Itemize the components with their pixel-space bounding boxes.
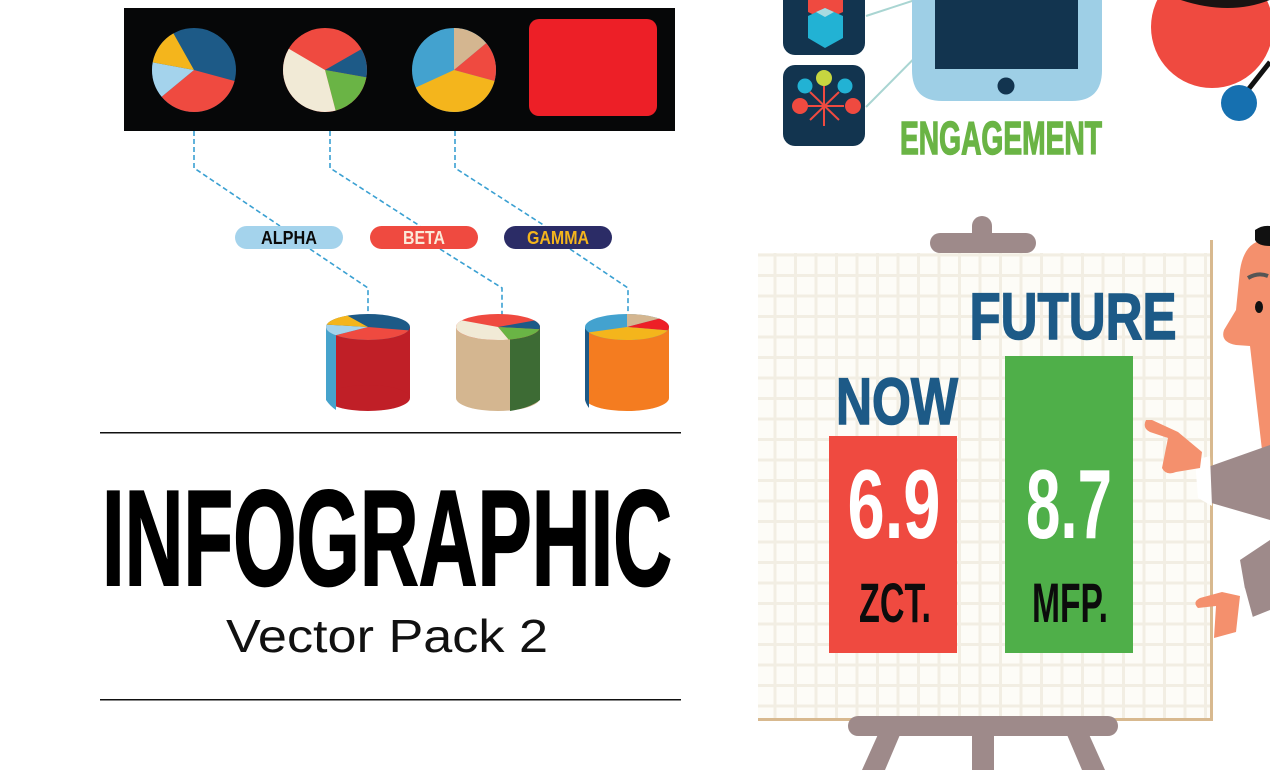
panel: pie charts black bar [124,8,675,131]
cylinder chart 1 [326,314,410,411]
molecule icon [1151,0,1270,121]
easel top hook [930,216,1036,253]
head [1223,240,1270,450]
label pill: alpha [235,226,343,249]
label pill: alpha: ALPHA [261,228,317,248]
subtitle: Vector Pack 2 [226,610,548,662]
label pill: gamma [504,226,612,249]
engagement label: ENGAGEMENT [900,112,1102,164]
easel legs [848,716,1118,770]
bar: now 6.9 ZCT. [829,436,957,653]
pie chart 2 [283,28,367,112]
icon: hexagon app [783,0,865,55]
pie chart 1 [152,28,236,112]
label pill: beta: BETA [403,228,445,248]
label pill: beta [370,226,478,249]
title: INFOGRAPHIC [102,462,672,614]
character: presenter [1145,226,1270,638]
panel: easel board [758,216,1213,770]
connector lines to tablet [866,0,972,107]
icon: network app [783,65,865,146]
pie chart 3 [412,28,496,112]
red square [529,19,657,116]
cylinder chart 3 [585,314,669,411]
label pill: gamma: GAMMA [527,228,589,248]
bar: future 8.7 MFP.: MFP. [1032,571,1108,634]
bar: now 6.9 ZCT.: ZCT. [859,571,931,634]
dashed connector lines [194,131,628,318]
icon: tablet [912,0,1102,101]
bar: future 8.7 MFP.: 8.7 [1026,449,1112,559]
bar: now 6.9 ZCT.: 6.9 [848,449,940,559]
now label: NOW [836,364,959,438]
future label: FUTURE [970,279,1176,353]
bar: future 8.7 MFP. [1005,356,1133,653]
pointing arm [1205,445,1270,520]
lower arm [1240,540,1270,618]
cylinder chart 2 [456,314,540,411]
